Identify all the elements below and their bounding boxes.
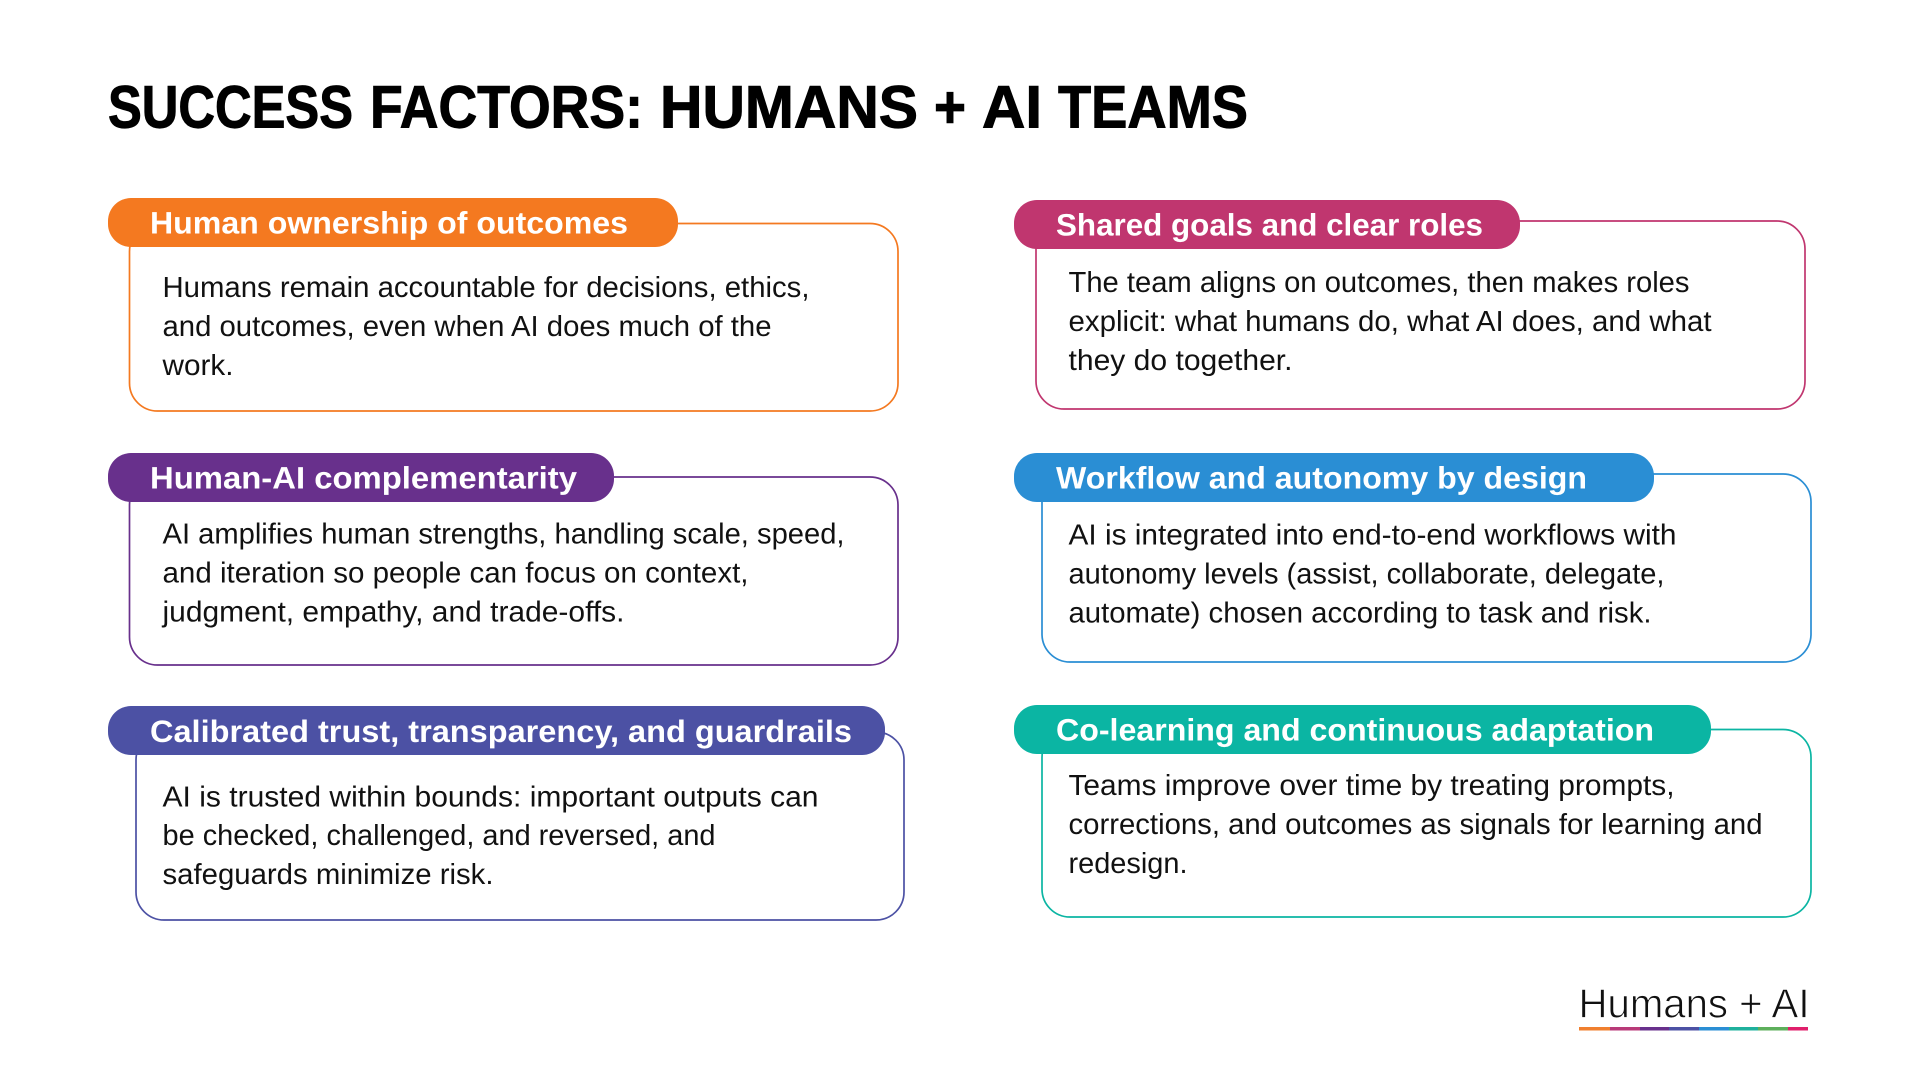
- body text: human ownership: and outcomes, even when AI does much of the: [162, 311, 772, 343]
- title: HUMANS: [660, 74, 918, 140]
- body text: co-learning: [1068, 770, 1762, 880]
- body text: workflow: autonomy levels (assist, collaborate, delegate,: [1068, 558, 1664, 590]
- title: AI: [982, 74, 1042, 140]
- title: SUCCESS: [108, 74, 353, 140]
- body text: shared goals: they do together.: [1068, 345, 1292, 377]
- body text: workflow: [1068, 520, 1676, 630]
- body text: workflow: AI is integrated into end-to-end workflows with: [1068, 520, 1676, 552]
- body text: complementarity: and iteration so people can focus on context,: [162, 558, 748, 590]
- body text: complementarity: [161, 518, 844, 628]
- body text: co-learning: corrections, and outcomes as signals for learning and: [1068, 809, 1762, 841]
- heading pill: shared goals: [1014, 200, 1520, 249]
- body text: human ownership: Humans remain accountable for decisions, ethics,: [162, 272, 810, 304]
- body text: co-learning: redesign.: [1068, 848, 1188, 880]
- panel: workflow and autonomy: [1014, 453, 1811, 662]
- body text: complementarity: AI amplifies human strengths, handling scale, speed,: [162, 518, 844, 550]
- heading pill: co-learning: Co-learning and continuous adaptation: [1056, 713, 1654, 748]
- body text: co-learning: Teams improve over time by treating prompts,: [1068, 770, 1674, 802]
- logo: Humans + AI: Humans + AI: [1578, 980, 1810, 1026]
- panel: calibrated trust: [108, 706, 904, 920]
- body text: shared goals: The team aligns on outcomes, then makes roles: [1068, 267, 1690, 299]
- heading pill: shared goals: Shared goals and clear roles: [1056, 208, 1483, 242]
- panel: co-learning: [1014, 705, 1811, 917]
- body text: calibrated trust: safeguards minimize risk.: [162, 859, 494, 891]
- title: FACTORS:: [370, 74, 643, 140]
- title: +: [934, 74, 966, 140]
- panel: human ownership of outcomes: [108, 198, 898, 411]
- body text: shared goals: [1068, 267, 1712, 377]
- heading pill: complementarity: Human-AI complementarity: [150, 461, 578, 496]
- heading pill: workflow: [1014, 453, 1654, 502]
- heading pill: human ownership: [108, 198, 678, 247]
- heading pill: calibrated trust: Calibrated trust, transparency, and guardrails: [150, 714, 852, 749]
- heading pill: complementarity: [108, 453, 614, 502]
- heading pill: co-learning: [1014, 705, 1711, 754]
- body text: calibrated trust: AI is trusted within bounds: important outputs can: [162, 782, 818, 814]
- body text: calibrated trust: be checked, challenged, and reversed, and: [162, 820, 716, 852]
- body text: workflow: automate) chosen according to task and risk.: [1068, 598, 1652, 630]
- panel: human-AI complementarity: [108, 453, 898, 665]
- body text: complementarity: judgment, empathy, and trade-offs.: [161, 596, 624, 628]
- body text: shared goals: explicit: what humans do, what AI does, and what: [1068, 306, 1712, 338]
- body text: calibrated trust: [162, 782, 818, 891]
- heading pill: human ownership: Human ownership of outcomes: [150, 206, 628, 241]
- panel: shared goals: [1014, 200, 1805, 409]
- title: TEAMS: [1058, 74, 1248, 140]
- title: [108, 74, 1248, 140]
- body text: human ownership: [161, 272, 810, 382]
- heading pill: calibrated trust: [108, 706, 885, 755]
- body text: human ownership: work.: [161, 350, 234, 382]
- heading pill: workflow: Workflow and autonomy by design: [1056, 461, 1587, 496]
- logo underline: [1579, 1027, 1808, 1030]
